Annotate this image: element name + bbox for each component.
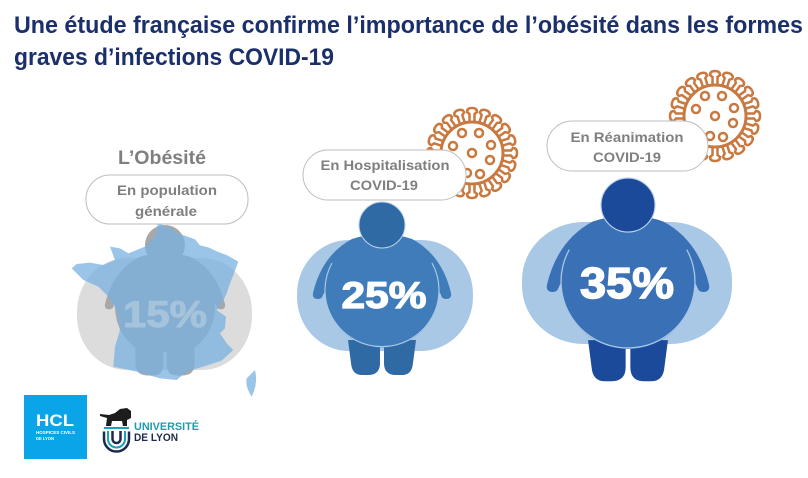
panel: réanimation 35%: [522, 121, 732, 381]
title: graves d’infections COVID-19: [14, 44, 334, 71]
panel: hospitalisation 25%: [297, 150, 473, 375]
label pill: En population générale: En population: [117, 182, 217, 198]
grey body blob: [77, 258, 252, 370]
light body blob: [522, 222, 732, 344]
logo: HCL: DE LYON: [36, 436, 54, 441]
label pill: En Réanimation COVID-19: COVID-19: [593, 149, 661, 165]
icon: virus réanimation: [670, 71, 760, 161]
title: Une étude française confirme l’importance de l’obésité dans les formes: [14, 12, 803, 39]
title: [14, 12, 803, 71]
logo: Université de Lyon: DE LYON: [134, 432, 178, 444]
logo: HCL: HCL: [36, 411, 74, 430]
shield: [104, 428, 129, 452]
logo: Université de Lyon: [100, 408, 199, 452]
value: 25%: 25%: [342, 275, 426, 316]
logo: HCL: [24, 395, 87, 459]
lion: [100, 408, 131, 426]
label pill: En Réanimation COVID-19: En Réanimation: [570, 129, 684, 145]
grey silhouette: [105, 225, 225, 376]
logo: HCL: HOSPICES CIVILS: [36, 430, 75, 435]
person silhouette: [547, 178, 709, 381]
heading: L'Obésité: L’Obésité: [118, 148, 206, 169]
label pill: En population générale: générale: [135, 203, 197, 219]
label pill: En Hospitalisation COVID-19: [303, 150, 466, 200]
label pill: En Hospitalisation COVID-19: En Hospitalisation: [320, 157, 450, 173]
value: 35%: 35%: [580, 259, 674, 308]
light body blob: [297, 240, 473, 351]
value: 15%: 15%: [123, 294, 207, 335]
map of France: [72, 222, 256, 397]
label pill: En Hospitalisation COVID-19: COVID-19: [350, 177, 418, 193]
label pill: En Réanimation COVID-19: [547, 121, 708, 171]
person silhouette: [313, 202, 451, 375]
label pill: En population générale: [86, 175, 248, 224]
panel: population générale 15%: [72, 148, 256, 397]
logo: Université de Lyon: UNIVERSITÉ: [134, 420, 199, 433]
icon: virus hospitalisation: [427, 108, 517, 198]
